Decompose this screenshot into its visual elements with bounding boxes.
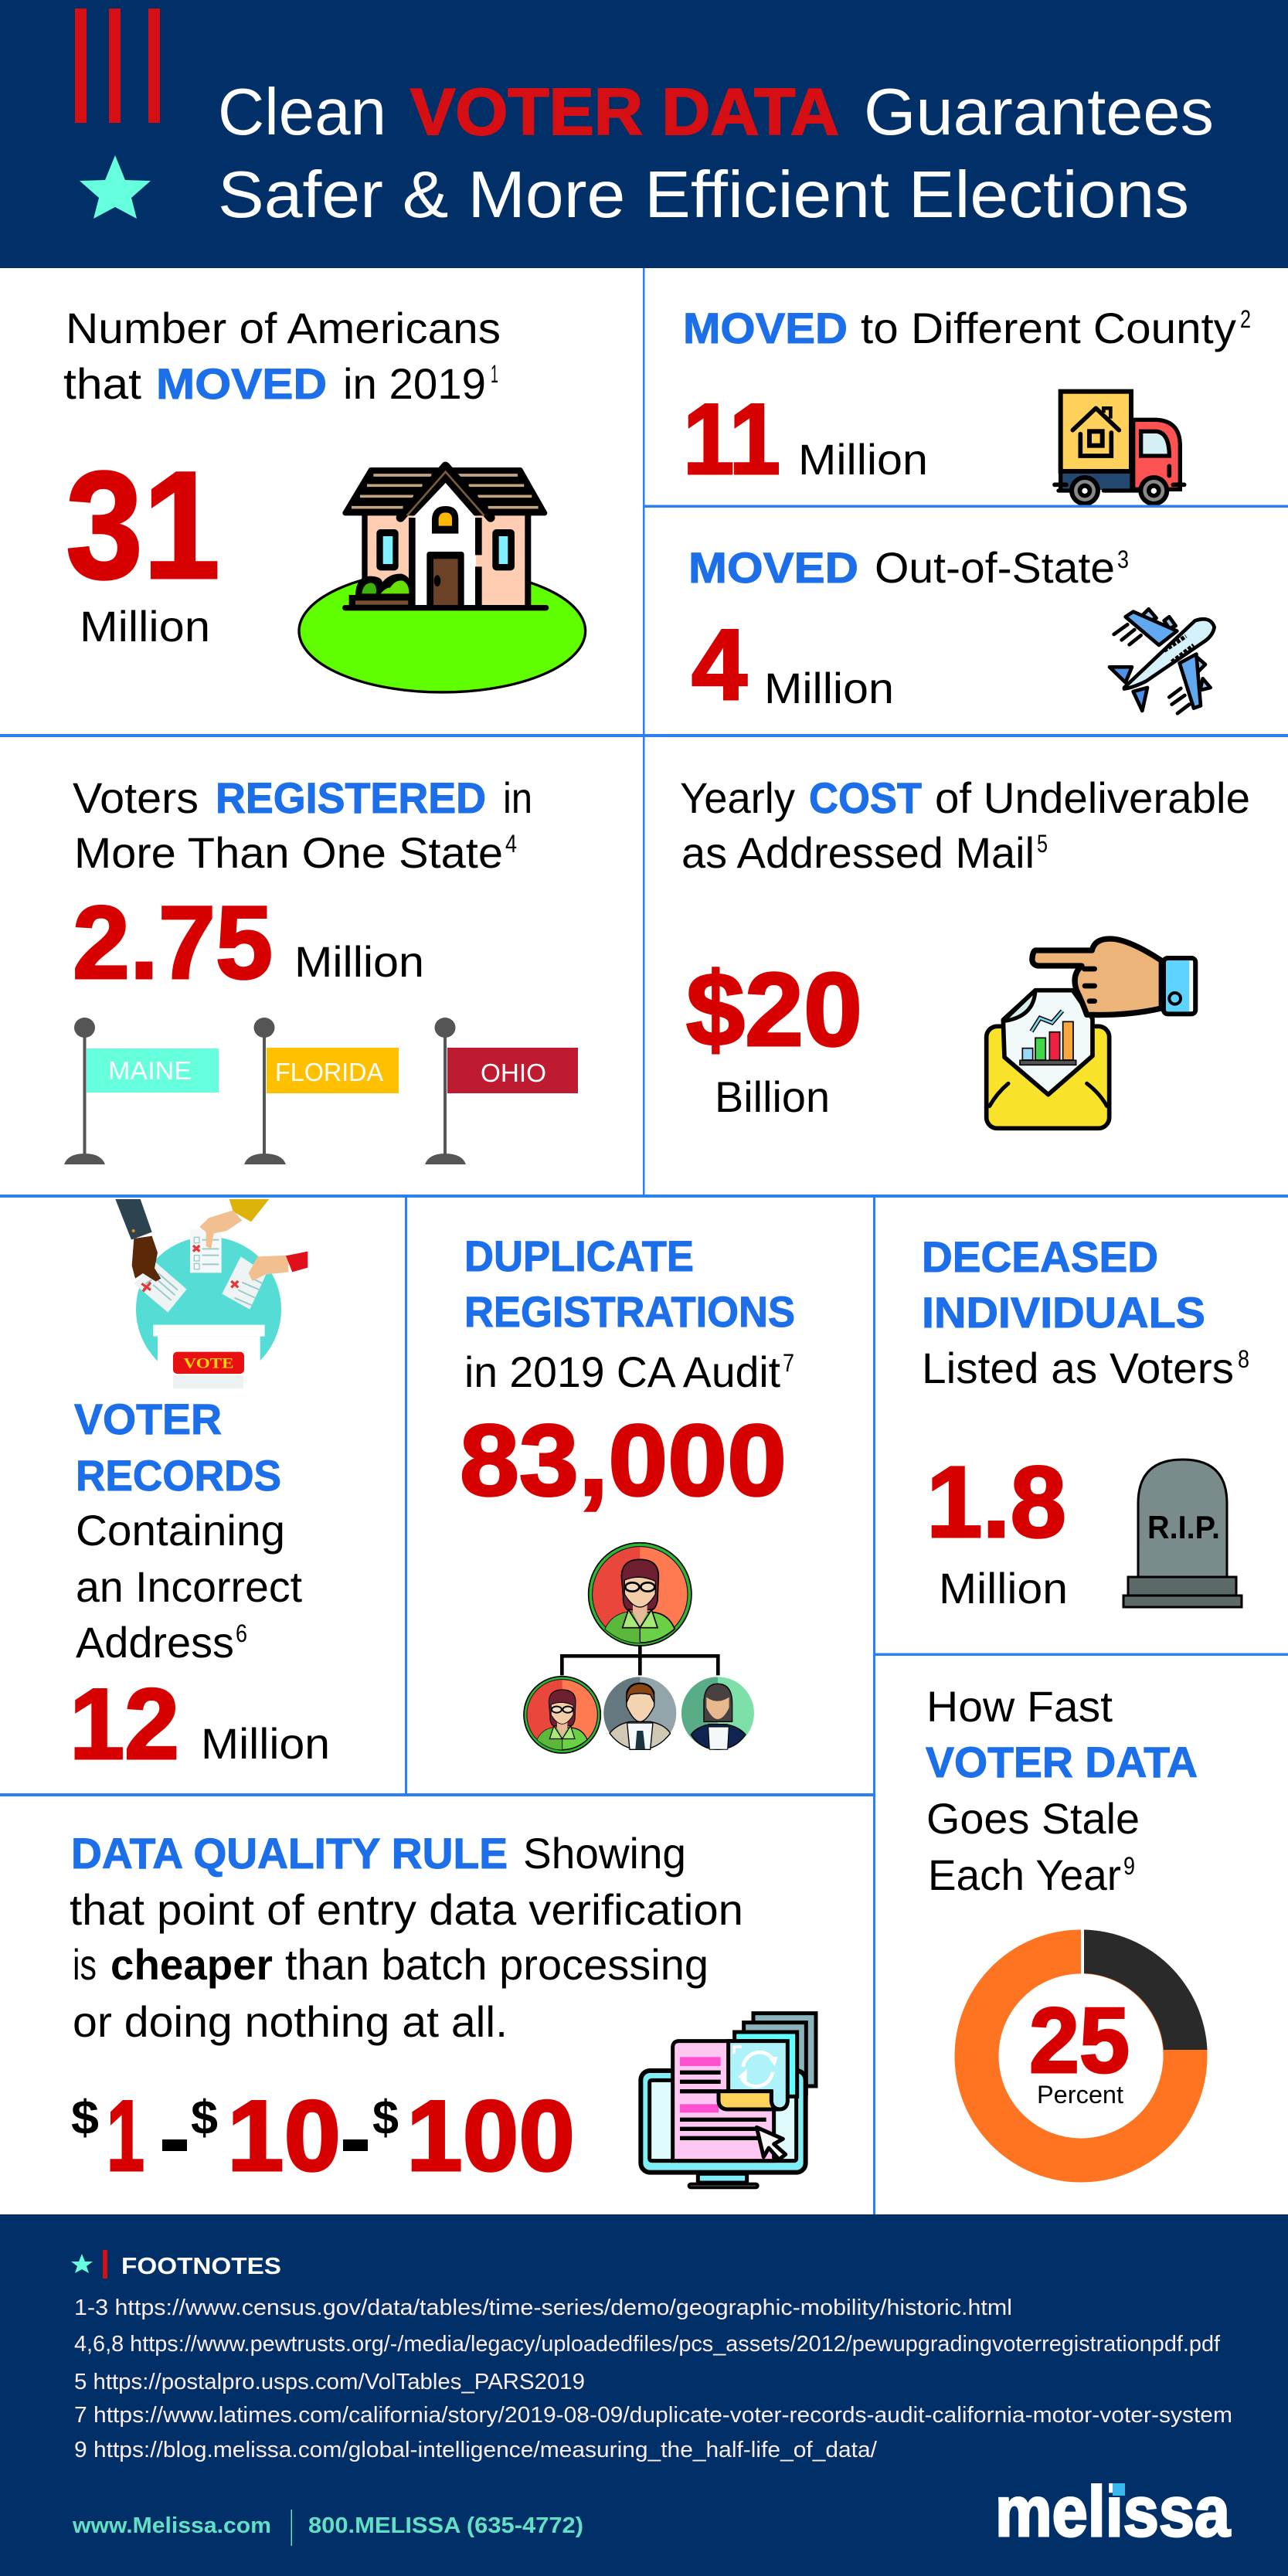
heading: voter data stale: How Fast (926, 1682, 1113, 1731)
heading: moved to different county: 2 (1240, 305, 1251, 333)
number: 1.8 million (926, 1445, 1068, 1613)
icon: moving truck (1055, 392, 1184, 506)
heading: moved to different county: MOVED (683, 304, 848, 352)
heading: voters registered (73, 773, 532, 877)
heading: voter data stale (926, 1682, 1198, 1899)
heading: voter records: Address (76, 1618, 234, 1667)
number: $1-$10-$100: $ (191, 2092, 218, 2145)
panel: Americans that moved (0, 268, 644, 736)
panel: deceased individuals (874, 1196, 1288, 1654)
heading: voter records (74, 1395, 302, 1667)
number: $1-$10-$100: $ (71, 2092, 99, 2145)
number: 31 million: 31 (66, 440, 220, 610)
panel: data quality rule (0, 1795, 874, 2214)
heading: moved to different county: to Different County (861, 304, 1236, 352)
number: 12 million (70, 1667, 330, 1780)
text: source list (74, 2296, 1232, 2462)
number: $20 billion: Billion (715, 1072, 830, 1121)
heading: number of Americans moved: MOVED (156, 359, 327, 408)
text: source list: 9 https://blog.melissa.com/global-intelligence/measuring_the_half-life_of_data/ (74, 2438, 878, 2462)
flag: Florida: FLORIDA (275, 1058, 383, 1086)
text: data quality rule description: Showing (523, 1829, 686, 1878)
heading: deceased individuals (922, 1232, 1249, 1392)
title: Guarantees (864, 76, 1214, 149)
divider: red bar (103, 2250, 107, 2279)
heading: voters registered: 4 (505, 830, 517, 858)
number: 2.75 million (73, 885, 424, 1001)
heading: moved out-of-state: 3 (1117, 545, 1129, 573)
grid dividers (0, 268, 1288, 2214)
heading: yearly cost: 5 (1037, 830, 1048, 858)
number: 1.8 million: Million (939, 1564, 1068, 1613)
heading: yearly cost: as Addressed Mail (681, 828, 1035, 877)
heading: yearly cost (680, 773, 1250, 877)
text: source list: 1-3 https://www.census.gov/data/tables/time-series/demo/geographic-mobility/historic.html (74, 2296, 1012, 2320)
flag: Ohio: OHIO (481, 1059, 546, 1087)
icon: org chart of duplicated people (524, 1543, 754, 1753)
panel: moved out of state (644, 506, 1288, 736)
heading: moved out-of-state: MOVED (688, 543, 858, 592)
title: Safer & More Efficient Elections (218, 158, 1189, 232)
heading: duplicate registrations: 7 (783, 1349, 794, 1377)
text: source list: 5 https://postalpro.usps.com/VolTables_PARS2019 (74, 2370, 585, 2394)
icon: teal star (80, 155, 151, 219)
text: data quality rule description: than batch processing (285, 1940, 709, 1989)
heading: voter records: an Incorrect (76, 1562, 302, 1611)
title (218, 76, 1214, 232)
number: 83,000: 83,000 (460, 1403, 787, 1517)
icon: hand and envelope with chart (987, 939, 1195, 1128)
icon: hands dropping ballots in vote box: VOTE (183, 1356, 233, 1372)
heading: footnotes: FOOTNOTES (121, 2252, 281, 2279)
heading: deceased individuals: INDIVIDUALS (922, 1288, 1205, 1337)
number: 11 million: Million (798, 435, 928, 484)
heading: deceased individuals: 8 (1238, 1345, 1249, 1373)
icon: house on green lawn (299, 466, 586, 692)
donut chart: 25 percent: Percent (1037, 2081, 1123, 2109)
heading: number of Americans moved: 1 (491, 360, 498, 388)
header banner (0, 0, 1288, 268)
heading: deceased individuals: Listed as Voters (922, 1344, 1234, 1392)
heading: number of Americans moved: in 2019 (343, 359, 486, 408)
title: Clean (218, 76, 386, 149)
flag: Florida (244, 1018, 399, 1164)
heading: duplicate registrations: REGISTRATIONS (464, 1287, 795, 1336)
icon: RIP tombstone (1123, 1460, 1242, 1607)
donut chart: 25 percent: 25 (1029, 1989, 1130, 2092)
heading: yearly cost: COST (809, 773, 922, 822)
number: $1-$10-$100: 1 (107, 2079, 144, 2192)
contact details (72, 2510, 583, 2546)
heading: voters registered: Voters (73, 773, 199, 822)
number: $20 billion: $20 (686, 951, 862, 1068)
donut chart: 25 percent (977, 1928, 1207, 2160)
icon: computer with documents and cursor (641, 2014, 816, 2186)
heading: voters registered: REGISTERED (216, 773, 486, 822)
flag: Ohio (425, 1018, 578, 1164)
heading: number of Americans moved: Number of Americans (66, 304, 501, 352)
number: 11 million (683, 382, 928, 495)
footer (0, 2214, 1288, 2576)
heading: moved out-of-state (688, 543, 1129, 592)
heading: number of Americans moved (63, 304, 501, 408)
heading: voter records: RECORDS (76, 1451, 281, 1500)
number: $20 billion (686, 951, 862, 1121)
panel: voter records with incorrect address (0, 1196, 406, 1795)
panel: voters registered in more than one state (0, 736, 644, 1196)
heading: voter records: VOTER (74, 1395, 222, 1443)
heading: voters registered: More Than One State (74, 828, 503, 877)
text: data quality rule description: cheaper (110, 1940, 273, 1989)
number: $1-$10-$100 (71, 2079, 575, 2192)
number: 4 million: Million (764, 664, 894, 712)
heading: number of Americans moved: that (63, 359, 141, 408)
number: 4 million (692, 608, 894, 721)
title: VOTER DATA (410, 76, 839, 149)
heading: duplicate registrations (464, 1232, 795, 1396)
panel: moved to different county (644, 268, 1288, 506)
icon: airplane (1110, 609, 1215, 713)
heading: voter data stale: Each Year (928, 1850, 1121, 1899)
icon: footnote star (71, 2254, 93, 2273)
heading: voter records: Containing (76, 1506, 285, 1555)
flag: Maine (64, 1018, 219, 1164)
contact details: 800.MELISSA (635-4772) (308, 2513, 583, 2538)
logo: melissa: melissa (995, 2472, 1231, 2551)
number: 2.75 million: 2.75 (73, 885, 273, 1001)
text: source list: 7 https://www.latimes.com/california/story/2019-08-09/duplicate-voter-records-audit-california-motor-voter-system (74, 2403, 1232, 2428)
panel: yearly cost of undeliverable mail (644, 736, 1288, 1196)
icon: hands dropping ballots in vote box (115, 1199, 308, 1397)
heading: voter data stale: Goes Stale (926, 1794, 1140, 1843)
heading: yearly cost: Yearly (680, 773, 795, 822)
panel: duplicate registrations (406, 1196, 874, 1795)
text: data quality rule description: or doing nothing at all. (73, 1997, 508, 2046)
contact details: www.Melissa.com (72, 2513, 271, 2538)
heading: voter data stale: 9 (1123, 1852, 1135, 1880)
number: 12 million: Million (201, 1719, 330, 1768)
heading: yearly cost: of Undeliverable (935, 773, 1250, 822)
text: data quality rule description (70, 1829, 743, 2046)
text: data quality rule description: DATA QUALITY RULE (71, 1829, 508, 1878)
heading: voter data stale: VOTER DATA (926, 1738, 1198, 1786)
heading: moved out-of-state: Out-of-State (875, 543, 1115, 592)
text: data quality rule description: is (73, 1940, 97, 1989)
flag: Maine: MAINE (108, 1056, 192, 1085)
text: data quality rule description: that point of entry data verification (70, 1885, 743, 1934)
icon: three red stripes (75, 8, 160, 123)
heading: deceased individuals: DECEASED (922, 1232, 1158, 1281)
icon: RIP tombstone: R.I.P. (1147, 1509, 1220, 1545)
text: source list: 4,6,8 https://www.pewtrusts.org/-/media/legacy/uploadedfiles/pcs_assets/2012/pewupgradingvoterregistrationpdf.pdf (74, 2332, 1221, 2357)
number: $1-$10-$100: 100 (406, 2079, 575, 2192)
heading: voter records: 6 (236, 1619, 247, 1647)
heading: duplicate registrations: in 2019 CA Audit (464, 1347, 780, 1396)
number: 11 million: 11 (683, 382, 780, 495)
heading: voters registered: in (503, 773, 532, 822)
number: $1-$10-$100: $ (372, 2092, 399, 2145)
heading: moved to different county (683, 304, 1251, 352)
number: 12 million: 12 (70, 1667, 179, 1780)
number: 4 million: 4 (692, 608, 747, 721)
heading: duplicate registrations: DUPLICATE (464, 1232, 694, 1280)
number: $1-$10-$100: 10 (227, 2079, 341, 2192)
number: 31 million: Million (80, 602, 210, 651)
number: 1.8 million: 1.8 (926, 1445, 1066, 1558)
number: 2.75 million: Million (294, 937, 424, 986)
panel: how fast voter data goes stale (874, 1654, 1288, 2214)
